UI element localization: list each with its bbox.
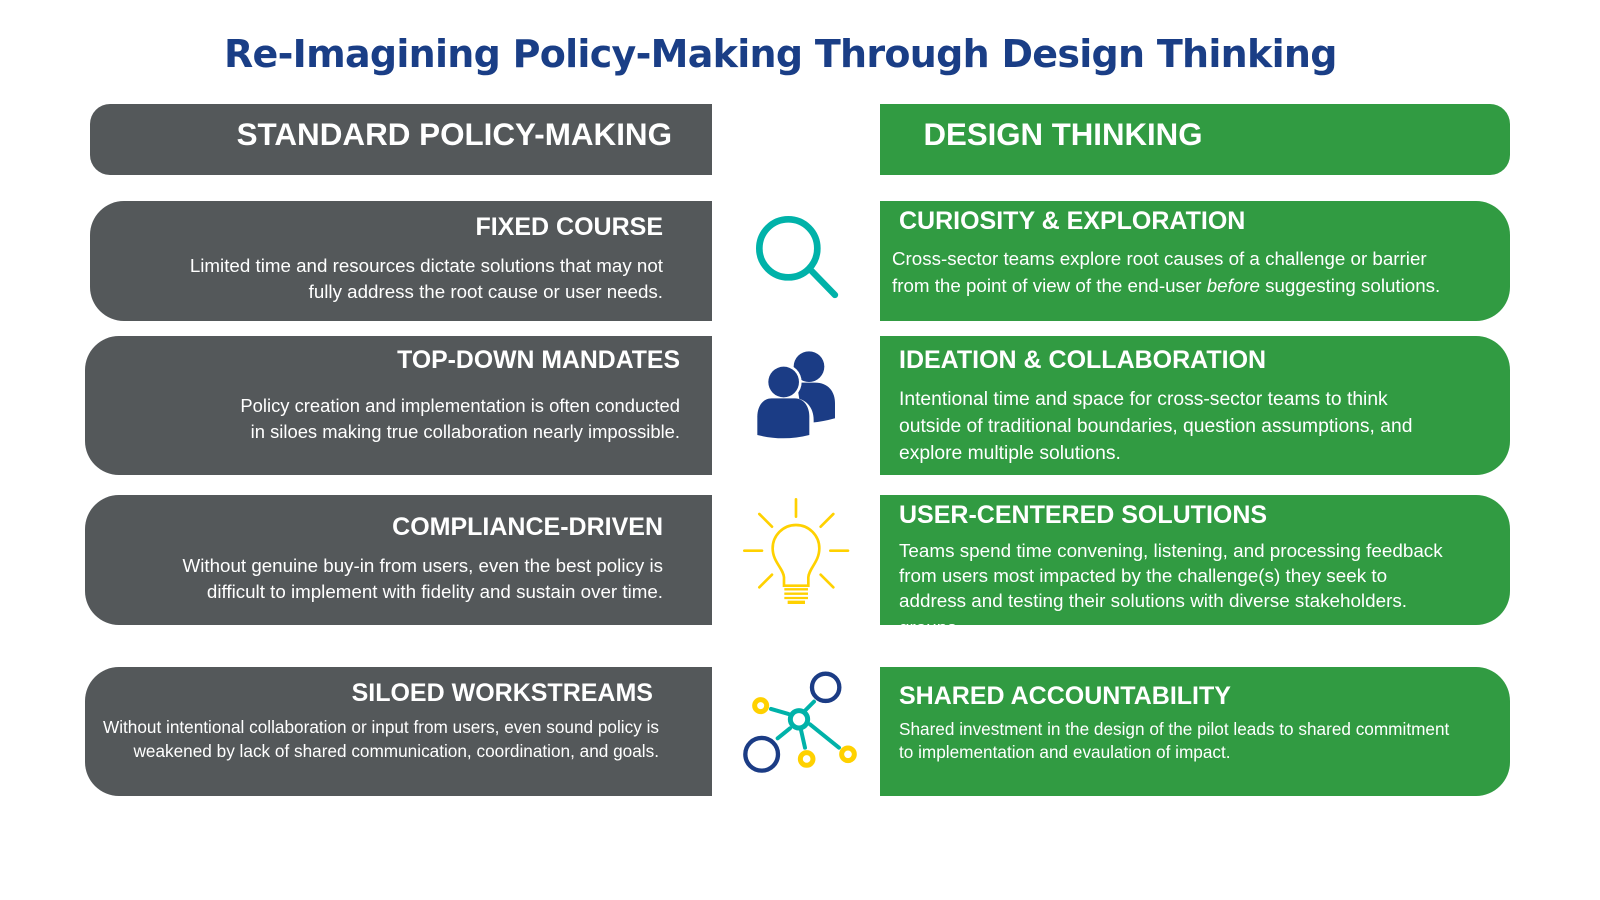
panel: shared accountability — [880, 667, 1510, 796]
panel: curiosity and exploration: Cross-sector teams explore root causes of a challenge or barrier — [892, 248, 1427, 269]
panel: siloed workstreams — [85, 667, 712, 796]
panel: fixed course: Limited time and resources dictate solutions that may not — [190, 255, 663, 276]
panel: top-down mandates: Policy creation and implementation is often conducted — [240, 395, 680, 416]
header: standard policy-making: STANDARD POLICY-MAKING — [237, 117, 672, 152]
panel: curiosity and exploration: CURIOSITY & EXPLORATION — [899, 207, 1245, 235]
panel: top-down mandates: in siloes making true collaboration nearly impossible. — [251, 421, 680, 442]
header: design thinking — [880, 104, 1510, 175]
panel: user-centered solutions — [880, 495, 1510, 625]
panel: curiosity and exploration — [880, 200, 1510, 320]
header: standard policy-making — [90, 104, 712, 175]
header: design thinking: DESIGN THINKING — [924, 117, 1202, 152]
panel: ideation and collaboration — [880, 336, 1510, 475]
panel: ideation and collaboration: Intentional time and space for cross-sector teams to think — [899, 389, 1388, 410]
panel: shared accountability: to implementation and evaulation of impact. — [899, 742, 1231, 762]
panel: ideation and collaboration: explore multiple solutions. — [899, 443, 1121, 464]
title: Re-Imagining Policy-Making Through Design Thinking — [224, 32, 1337, 76]
panel: compliance-driven: Without genuine buy-in from users, even the best policy is — [183, 555, 663, 576]
panel: siloed workstreams: Without intentional collaboration or input from users, even sound policy is — [103, 717, 659, 737]
panel: shared accountability: SHARED ACCOUNTABILITY — [899, 682, 1231, 710]
panel: siloed workstreams: weakened by lack of shared communication, coordination, and goals. — [134, 740, 659, 760]
panel: shared accountability: Shared investment in the design of the pilot leads to shared commitment — [899, 719, 1449, 739]
icon: light bulb — [744, 499, 848, 602]
panel: user-centered solutions: Teams spend time convening, listening, and processing feedback — [899, 540, 1443, 561]
panel: compliance-driven: COMPLIANCE-DRIVEN — [392, 513, 663, 541]
panel: top-down mandates: TOP-DOWN MANDATES — [397, 347, 680, 374]
panel: user-centered solutions: from users most impacted by the challenge(s) they seek to — [899, 565, 1387, 586]
icon: magnifying glass — [759, 219, 835, 295]
panel: compliance-driven — [85, 495, 712, 625]
panel: ideation and collaboration: outside of traditional boundaries, question assumptions, and — [899, 416, 1412, 437]
panel: user-centered solutions: address and testing their solutions with diverse stakeholders. — [899, 590, 1407, 611]
panel: fixed course: FIXED COURSE — [475, 213, 663, 241]
panel: top-down mandates — [85, 336, 712, 475]
icon: people — [753, 351, 835, 438]
panel: fixed course — [90, 200, 712, 320]
panel: user-centered solutions: USER-CENTERED SOLUTIONS — [899, 501, 1267, 529]
panel: fixed course: fully address the root cause or user needs. — [309, 281, 663, 302]
panel: ideation and collaboration: IDEATION & COLLABORATION — [899, 346, 1266, 374]
panel: siloed workstreams: SILOED WORKSTREAMS — [352, 679, 653, 707]
panel: curiosity and exploration: from the point of view of the end-user before suggesting solutions. — [892, 274, 1440, 296]
panel: compliance-driven: difficult to implement with fidelity and sustain over time. — [207, 581, 663, 602]
icon: network — [745, 674, 854, 771]
